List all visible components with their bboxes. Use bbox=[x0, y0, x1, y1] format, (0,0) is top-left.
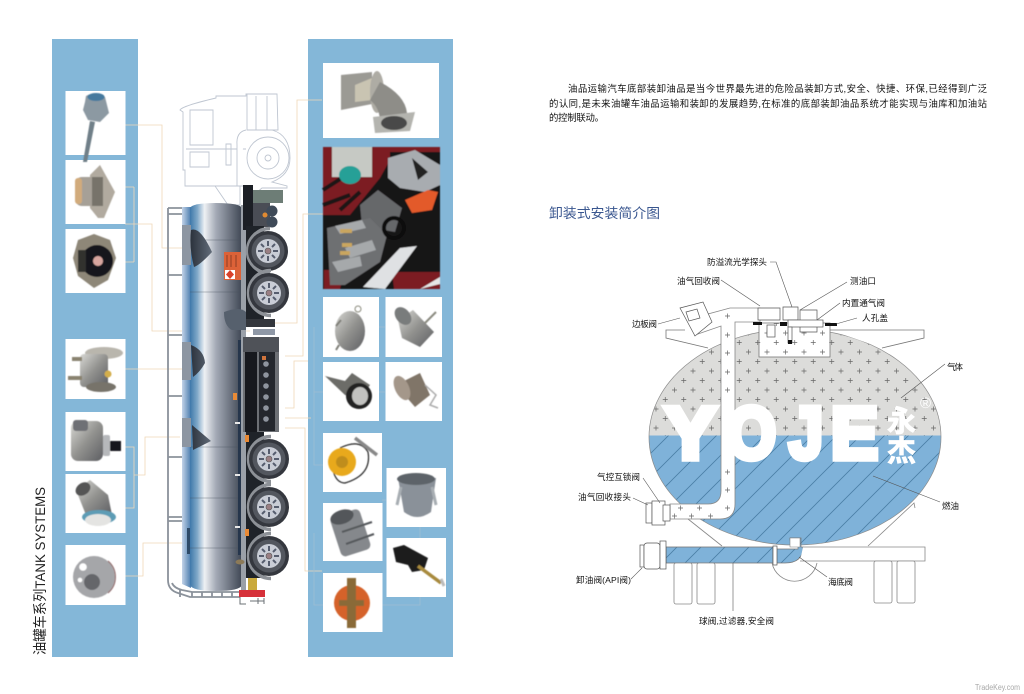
icon: elbow valve blue flange bbox=[73, 479, 116, 526]
callout labels: 防溢流光学探头 bbox=[707, 256, 767, 267]
cross members bbox=[246, 319, 275, 327]
tank supports bbox=[688, 503, 915, 546]
icon: threaded adapter bbox=[328, 507, 374, 558]
discharge pipe bbox=[666, 547, 773, 563]
tank body bbox=[190, 203, 242, 591]
truck cab outline bbox=[180, 94, 290, 205]
chassis beam bbox=[800, 547, 925, 561]
icon: black cap bbox=[73, 234, 116, 288]
heading: 卸装式安装简介图 bbox=[549, 205, 660, 221]
manhole fittings bbox=[680, 302, 823, 343]
callout labels: 油气回收接头 bbox=[578, 491, 631, 502]
callout labels: 人孔盖 bbox=[862, 312, 888, 323]
white boxes: right components bbox=[323, 63, 446, 632]
manhole box bbox=[759, 323, 830, 357]
intro paragraph: 的认同,是未来油罐车油品运输和装卸的发展趋势,在标准的底部装卸油品系统才能实现与油库和加油站 bbox=[549, 98, 987, 109]
icon: API valve bbox=[68, 347, 123, 392]
logo hanzi: 永 bbox=[887, 405, 916, 438]
icon: lever coupler bbox=[325, 373, 372, 409]
vent pipe bbox=[670, 308, 760, 519]
orange markers bbox=[233, 393, 249, 536]
YOJE logo bbox=[665, 394, 878, 474]
dark chassis rails bbox=[246, 226, 264, 326]
callout labels: 油气回收阀 bbox=[677, 275, 720, 286]
wheels and foot valve arc bbox=[674, 561, 915, 604]
YOJE logo: Y bbox=[665, 394, 716, 474]
tanker truck, top view bbox=[168, 185, 289, 604]
intro paragraph: 油品运输汽车底部装卸油品是当今世界最先进的危险品装卸方式,安全、快捷、环保,已经得到广泛 bbox=[568, 83, 988, 94]
callout labels: 球阀,过滤器,安全阀 bbox=[699, 615, 774, 626]
callout labels: 气体 bbox=[947, 361, 963, 372]
icon: dipstick sensor bbox=[83, 93, 109, 162]
logo hanzi: 杰 bbox=[887, 435, 916, 468]
callout labels: 气控互锁阀 bbox=[597, 471, 640, 482]
top deck bbox=[666, 330, 924, 348]
white boxes: left components bbox=[66, 91, 126, 605]
tank gas zone bbox=[650, 332, 940, 436]
intro paragraph: 的控制联动。 bbox=[549, 112, 604, 123]
logo hanzi bbox=[887, 405, 916, 468]
API discharge valve bbox=[640, 541, 777, 569]
photo: installed bottom loading valves bbox=[323, 147, 440, 289]
rear tank hatch bbox=[224, 309, 246, 330]
icon: black manifold valve bbox=[393, 545, 444, 586]
rear bumper bbox=[248, 578, 257, 590]
front chassis block bbox=[243, 185, 253, 230]
intro paragraph bbox=[549, 83, 988, 123]
wheels bbox=[248, 228, 288, 274]
YOJE logo: J bbox=[789, 394, 823, 474]
callout labels: 内置通气阀 bbox=[842, 297, 885, 308]
panel: right blue column bbox=[308, 39, 453, 657]
icon: adapter with chain bbox=[390, 373, 438, 408]
tank fittings bbox=[182, 225, 191, 447]
vapor coupler bbox=[646, 501, 670, 525]
callout labels bbox=[576, 256, 963, 626]
hazard placard bbox=[224, 252, 241, 280]
side title: 油罐车系列TANK SYSTEMS bbox=[32, 487, 48, 655]
icon: round disc valve bbox=[73, 556, 115, 598]
tank side band bbox=[182, 207, 191, 588]
tank fuel zone bbox=[649, 436, 941, 545]
connector lines: left and right callouts bbox=[125, 100, 420, 605]
icon: orange cap bbox=[334, 578, 370, 628]
frame strip bbox=[241, 205, 246, 590]
callout labels: 测油口 bbox=[850, 275, 876, 286]
callout labels: 海底阀 bbox=[828, 576, 853, 587]
YOJE logo: E bbox=[831, 394, 878, 474]
callout labels: 燃油 bbox=[942, 500, 959, 511]
YOJE logo: O bbox=[727, 394, 776, 474]
pipe plus marks bbox=[672, 314, 730, 518]
diagram: bottom loading tank cross-section bbox=[576, 256, 963, 626]
icon: dome cap bbox=[335, 306, 365, 351]
icon: camlock coupling bbox=[391, 304, 436, 347]
ladder rail and rear guard bbox=[168, 208, 240, 597]
icon: flanged valve bbox=[75, 165, 115, 218]
registered mark: ® bbox=[920, 395, 931, 412]
panel: left blue column bbox=[52, 39, 138, 657]
icon: large elbow flange bbox=[341, 71, 415, 133]
icon: elbow valve grey bbox=[71, 420, 121, 461]
leader lines bbox=[631, 262, 945, 611]
callout labels: 卸油阀(API阀) bbox=[576, 574, 631, 585]
manifold control box bbox=[243, 337, 279, 432]
icon: grey cylinder coupling bbox=[397, 473, 436, 517]
callout labels: 边板阀 bbox=[632, 318, 657, 329]
icon: yellow reel bbox=[328, 438, 377, 483]
